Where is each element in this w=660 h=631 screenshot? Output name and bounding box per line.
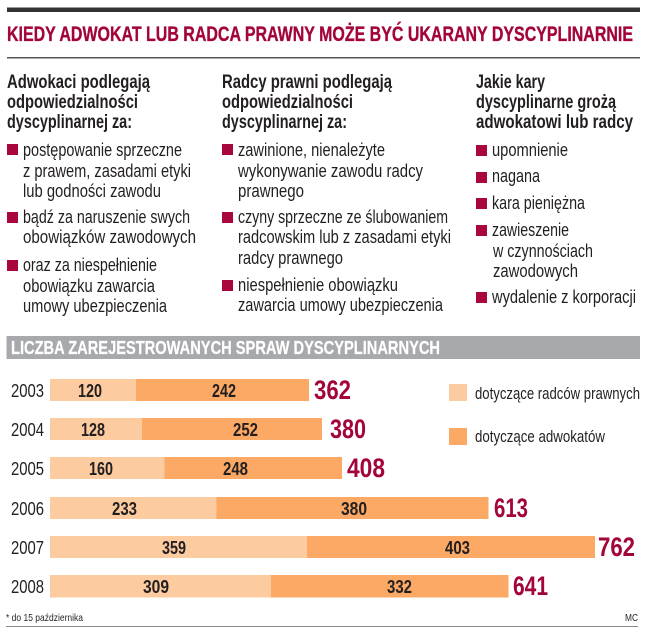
list item: postępowanie: z prawem, zasadami etyki	[23, 161, 191, 181]
list item: zawieszenie	[476, 220, 593, 281]
list item: zawinione: zawinione, nienależyte	[238, 140, 385, 160]
legend	[449, 384, 640, 446]
bar row 2008: 641	[513, 571, 548, 601]
legend item: adwokaci	[449, 428, 605, 446]
legend item: adwokaci: dotyczące adwokatów	[475, 428, 605, 446]
bar row 2003: 2003	[11, 381, 44, 401]
bar row 2004: 252	[233, 420, 258, 440]
heading: adwokaci: odpowiedzialności	[7, 92, 138, 113]
bar row 2004: 128	[81, 420, 105, 440]
heading: radcy prawni: dyscyplinarnej za:	[222, 112, 347, 133]
list item: postępowanie: lub godności zawodu	[23, 181, 161, 201]
list item: nagana: nagana	[492, 166, 541, 186]
chart heading band: LICZBA ZAREJESTROWANYCH SPRAW DYSCYPLINARNYCH	[11, 338, 440, 358]
list item: czyny: radcowskim lub z zasadami etyki	[238, 227, 451, 247]
list item: zawinione: wykonywanie zawodu radcy	[237, 161, 423, 181]
bar row 2005: 160	[89, 459, 113, 479]
bar row 2003: 120	[78, 381, 102, 401]
bar row 2008: 2008	[11, 577, 44, 597]
bar row 2008	[11, 571, 548, 601]
list item: kara pieniężna: kara pieniężna	[492, 193, 586, 213]
bar row 2006: 380	[341, 499, 367, 519]
heading: adwokaci	[7, 72, 150, 133]
bar row 2007: 762	[598, 532, 635, 562]
list item: nagana	[476, 166, 541, 186]
bar row 2007: 403	[445, 538, 470, 558]
bar row 2004: 2004	[11, 420, 44, 440]
list item: zawieszenie: zawieszenie	[492, 220, 569, 240]
bar row 2006: 233	[112, 499, 137, 519]
bar chart	[11, 375, 635, 601]
panel: radcy prawni	[222, 72, 451, 315]
bar row 2005: 2005	[11, 459, 44, 479]
list item: zawinione: prawnego	[238, 181, 304, 201]
list item: niespełnienie: niespełnienie obowiązku	[238, 275, 398, 295]
list item: postępowanie	[7, 140, 191, 201]
bar row 2006: 2006	[11, 499, 44, 519]
panel: adwokaci	[7, 72, 196, 316]
bar row 2007	[11, 532, 635, 562]
bar row 2007: 2007	[11, 538, 44, 558]
list item: niespełnienie: zawarcia umowy ubezpieczenia	[238, 295, 444, 315]
bar row 2004	[11, 414, 366, 444]
bar row 2006	[11, 493, 528, 523]
source credit: MC	[625, 612, 638, 624]
list item: zawieszenie: zawodowych	[493, 261, 578, 281]
bar row 2008: 309	[143, 577, 169, 597]
list item: ubezpieczenie	[7, 255, 168, 316]
list item: czyny: radcy prawnego	[238, 248, 343, 268]
bar row 2003	[11, 375, 351, 405]
list item: ubezpieczenie: oraz za niespełnienie	[23, 255, 157, 275]
heading: adwokaci: dyscyplinarnej za:	[7, 112, 132, 133]
bar row 2003: 362	[314, 375, 351, 405]
bar row 2003: 242	[212, 381, 236, 401]
panel: kary	[476, 72, 636, 307]
list item: czyny: czyny sprzeczne ze ślubowaniem	[238, 207, 448, 227]
bar row 2006: 613	[494, 493, 528, 523]
list item: postępowanie: postępowanie sprzeczne	[23, 140, 182, 160]
heading: radcy prawni	[222, 72, 392, 133]
list item: czyny	[222, 207, 451, 268]
bar row 2005: 408	[347, 453, 385, 483]
list item: upomnienie: upomnienie	[492, 140, 568, 160]
list item: naruszenie: bądź za naruszenie swych	[23, 207, 190, 227]
list item: naruszenie: obowiązków zawodowych	[23, 227, 196, 247]
heading: radcy prawni: odpowiedzialności	[222, 92, 353, 113]
heading: adwokaci: Adwokaci podlegają	[7, 72, 150, 93]
list item: naruszenie	[7, 207, 196, 247]
list item: ubezpieczenie: umowy ubezpieczenia	[23, 296, 168, 316]
heading: radcy prawni: Radcy prawni podlegają	[222, 72, 392, 93]
heading: kary: Jakie kary	[476, 72, 545, 93]
list item: niespełnienie	[222, 275, 444, 315]
title	[7, 8, 640, 58]
list item: zawieszenie: w czynnościach	[492, 241, 593, 261]
bar row 2004: 380	[330, 414, 366, 444]
list item: zawinione	[222, 140, 423, 201]
bar row 2005	[11, 453, 385, 483]
heading: kary	[476, 72, 633, 133]
bar row 2005: 248	[223, 459, 248, 479]
list item: upomnienie	[476, 140, 568, 160]
heading: kary: dyscyplinarne grożą	[476, 92, 616, 113]
bar row 2008: 332	[387, 577, 412, 597]
footnote: * do 15 października	[6, 612, 83, 624]
bar row 2007: 359	[162, 538, 186, 558]
list item: ubezpieczenie: obowiązku zawarcia	[23, 276, 156, 296]
